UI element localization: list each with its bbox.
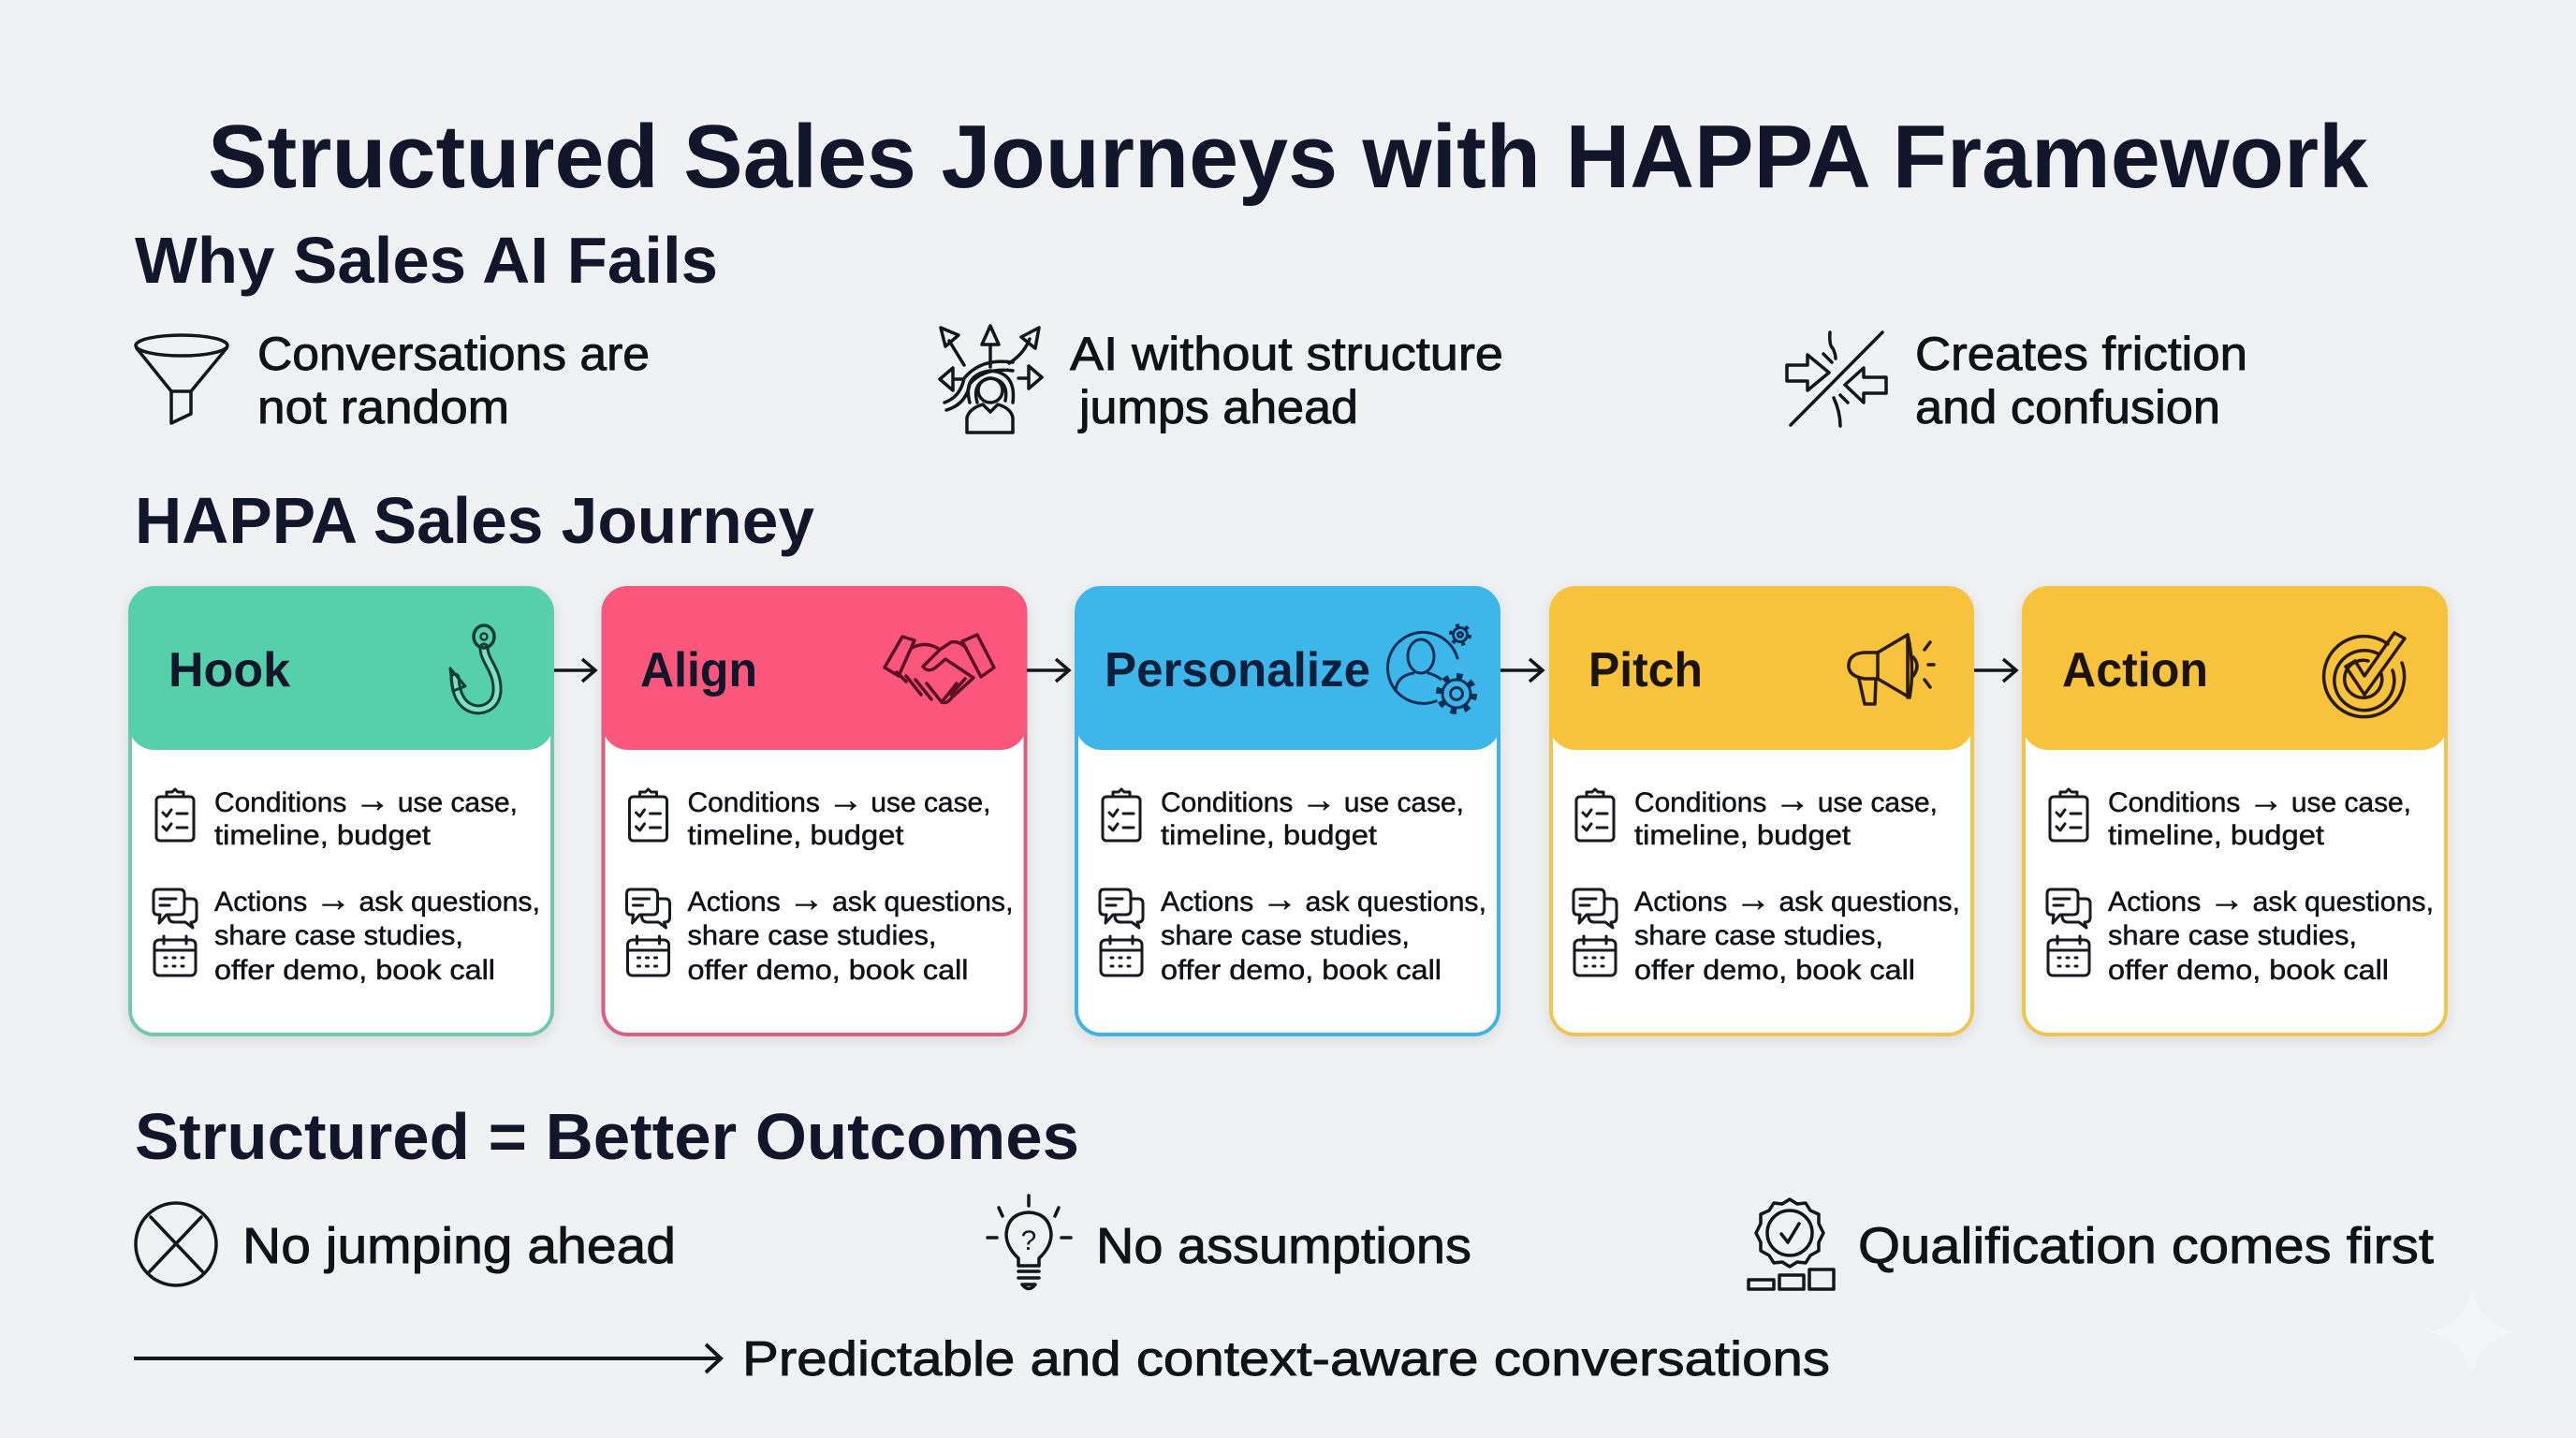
text: conversations are not random (257, 328, 650, 433)
text: conditions: Conditions → use case, (687, 781, 990, 820)
panel: Align card (602, 587, 1027, 1034)
icon: person with gears (1387, 625, 1477, 714)
text: actions (214, 880, 540, 986)
text: actions: Actions → ask questions, (687, 880, 1013, 919)
card title: Align: Align (640, 643, 757, 697)
icon: checklist clipboard (1576, 789, 1614, 841)
arrow: Hook to Align (554, 659, 595, 682)
icon: chat bubbles (154, 889, 197, 928)
text: actions: share case studies, (1161, 920, 1410, 951)
panel: Action card (2022, 587, 2448, 1034)
text: actions (1634, 880, 1960, 986)
arrow: Align to Personalize (1027, 659, 1069, 682)
icon: chat bubbles (2047, 889, 2090, 928)
icon: hook (450, 625, 497, 710)
panel: Pitch card (1549, 587, 1973, 1034)
text: actions: offer demo, book call (2108, 955, 2389, 986)
text: actions (2108, 880, 2434, 986)
icon: checklist clipboard (1103, 789, 1140, 841)
text: creates friction and confusion (1915, 328, 2247, 433)
icon: calendar (1101, 936, 1142, 976)
icon: target with check (2324, 633, 2405, 717)
card body: Align (627, 781, 1013, 986)
text: actions: Actions → ask questions, (1161, 880, 1486, 919)
icon: light bulb with question mark (988, 1196, 1071, 1288)
text: conditions: timeline, budget (1634, 820, 1852, 851)
panel: outcomes (136, 1196, 2434, 1289)
text: actions: offer demo, book call (1634, 955, 1915, 986)
text: conditions (214, 781, 518, 851)
text: conditions (2108, 781, 2411, 851)
icon: handshake (885, 635, 994, 702)
card header: Personalize (1076, 587, 1500, 750)
arrow: Personalize to Pitch (1500, 659, 1543, 682)
text: conditions: timeline, budget (1161, 820, 1378, 851)
icon: crossed circle (136, 1203, 216, 1285)
icon: calendar (1574, 936, 1616, 976)
arrow: Pitch to Action (1974, 659, 2016, 682)
icon: chat bubbles (1100, 889, 1143, 928)
icon: qualification badge and steps (1749, 1199, 1834, 1289)
icon: checklist clipboard (2050, 789, 2087, 841)
text: conditions: Conditions → use case, (1634, 781, 1938, 820)
title: Structured Sales Journeys with HAPPA Framework (208, 107, 2369, 207)
card body: Action (2047, 781, 2434, 986)
card body: Pitch (1573, 781, 1960, 986)
text: conditions (687, 781, 990, 851)
arrow: outcome line (134, 1344, 721, 1372)
text: no jumping ahead: No jumping ahead (242, 1218, 676, 1274)
text: conditions: Conditions → use case, (1161, 781, 1464, 820)
card title: Personalize: Personalize (1105, 643, 1370, 697)
card header: Action (2022, 587, 2448, 750)
icon: checklist clipboard (629, 789, 666, 841)
heading: why sales AI fails: Why Sales AI Fails (135, 224, 718, 297)
text: creates friction and confusion: and confusion (1915, 381, 2220, 433)
text: AI without structure jumps ahead: AI without structure (1070, 328, 1503, 380)
text: conditions: Conditions → use case, (214, 781, 518, 820)
card header: Pitch (1549, 587, 1973, 750)
text: conditions: Conditions → use case, (2108, 781, 2411, 820)
text: creates friction and confusion: Creates friction (1915, 328, 2247, 380)
text: conditions: timeline, budget (2108, 820, 2325, 851)
icon: megaphone (1849, 635, 1934, 704)
card header: Align (602, 587, 1027, 750)
icon: chat bubbles (1573, 889, 1617, 928)
panel: Personalize card (1076, 587, 1500, 1034)
card title: Pitch: Pitch (1588, 643, 1703, 697)
text: actions: offer demo, book call (1161, 955, 1442, 986)
icon: friction arrows (1787, 332, 1886, 426)
icon: funnel (136, 335, 227, 423)
text: conversations are not random: not random (257, 381, 509, 433)
text: actions: Actions → ask questions, (2108, 880, 2434, 919)
icon: calendar (627, 936, 668, 976)
text: conditions: timeline, budget (687, 820, 904, 851)
card title: Hook: Hook (168, 643, 290, 697)
text: actions: share case studies, (687, 920, 936, 951)
text: actions (1161, 880, 1486, 986)
icon: chat bubbles (627, 889, 670, 928)
card title: Action: Action (2062, 643, 2208, 697)
card body: Personalize (1100, 781, 1486, 986)
text: conditions (1161, 781, 1464, 851)
text: conditions (1634, 781, 1938, 851)
icon: calendar (154, 936, 196, 976)
panel: why sales AI fails items (136, 326, 2247, 433)
text: AI without structure jumps ahead: jumps ahead (1077, 381, 1358, 433)
card body: Hook (154, 781, 540, 986)
text: conditions: timeline, budget (214, 820, 432, 851)
card header: Hook (128, 587, 553, 750)
heading: HAPPA sales journey: HAPPA Sales Journey (135, 484, 814, 557)
text: actions: Actions → ask questions, (1634, 880, 1960, 919)
text: actions: share case studies, (2108, 920, 2357, 951)
text: qualification comes first: Qualification comes first (1858, 1218, 2434, 1274)
heading: structured = better outcomes: Structured = Better Outcomes (135, 1100, 1079, 1173)
text: actions: offer demo, book call (687, 955, 968, 986)
text: actions: share case studies, (1634, 920, 1883, 951)
icon: calendar (2048, 936, 2089, 976)
text: actions: share case studies, (214, 920, 463, 951)
text: no assumptions: No assumptions (1096, 1218, 1471, 1274)
panel: Hook card (128, 587, 553, 1034)
icon: sparkle watermark (2427, 1287, 2517, 1377)
icon: checklist clipboard (156, 789, 194, 841)
text: conversations are not random: Conversations are (257, 328, 650, 380)
icon: light bulb with question mark: ? (1021, 1225, 1036, 1256)
text: actions: offer demo, book call (214, 955, 495, 986)
text: AI without structure jumps ahead (1070, 328, 1503, 433)
icon: person with diverging arrows (940, 326, 1042, 433)
text: actions (687, 880, 1013, 986)
text: predictable and context-aware conversations: Predictable and context-aware conversations (742, 1332, 1830, 1387)
text: actions: Actions → ask questions, (214, 880, 540, 919)
